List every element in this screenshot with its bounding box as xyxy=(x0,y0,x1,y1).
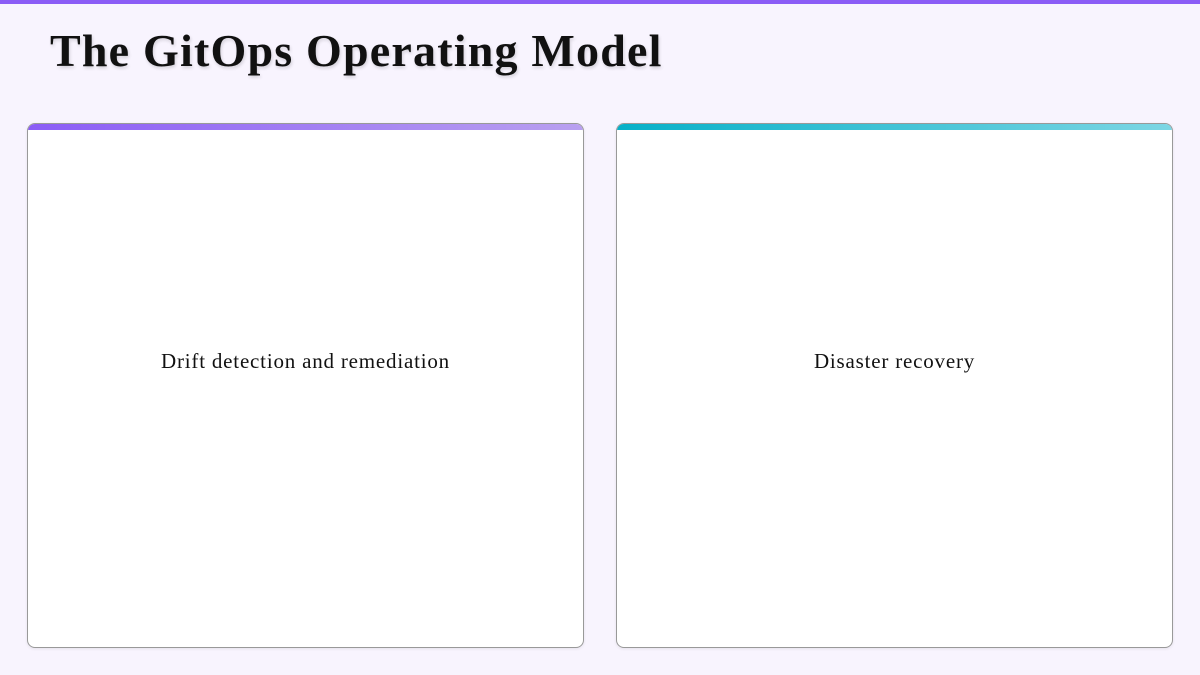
title: The GitOps Operating Model xyxy=(50,25,663,76)
panel: disaster recovery xyxy=(616,123,1173,648)
text: drift detection: Drift detection and remediation xyxy=(161,349,450,373)
panel: drift detection xyxy=(27,123,584,648)
text: disaster recovery: Disaster recovery xyxy=(814,349,975,373)
